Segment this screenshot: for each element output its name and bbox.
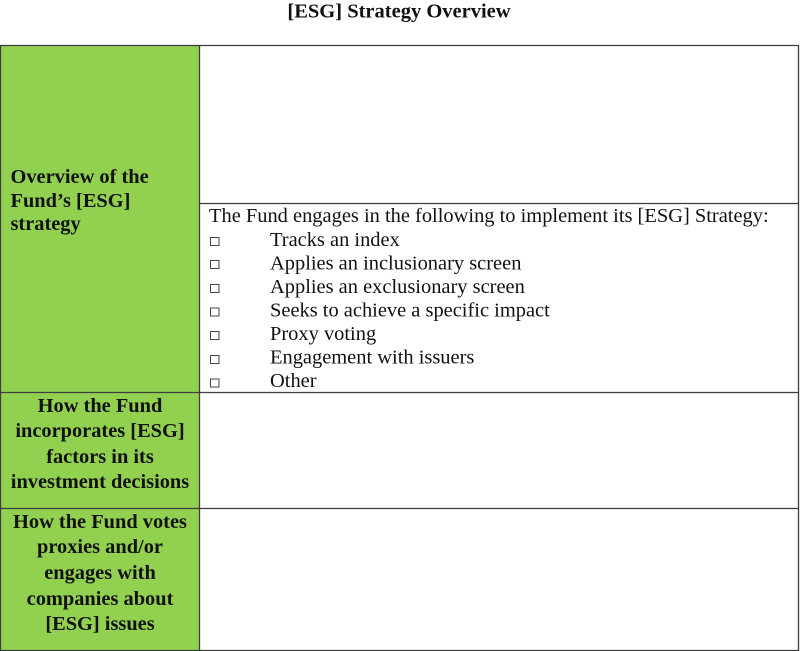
row label: how the fund incorporates factors: investment decisions — [11, 471, 189, 493]
panel: green label column — [0, 46, 200, 650]
row label: overview of strategy: Overview of the — [10, 166, 149, 188]
text: strategy implementation intro: The Fund engages in the following to implement its [ESG] Strategy: — [209, 205, 769, 227]
row label: how the fund votes proxies: companies about — [27, 588, 174, 610]
row label: how the fund votes proxies: How the Fund votes — [13, 511, 187, 533]
row label: overview of strategy: strategy — [10, 213, 81, 235]
checkbox item: proxy voting — [210, 323, 376, 345]
row label: how the fund votes proxies: [ESG] issues — [45, 613, 155, 635]
row label: how the fund incorporates factors: factors in its — [46, 446, 154, 468]
checkbox item: proxy voting: Proxy voting — [270, 323, 376, 345]
checkbox item: other: Other — [270, 370, 317, 392]
checkbox item: tracks an index — [210, 229, 400, 251]
row label: how the fund incorporates factors: How the Fund — [38, 395, 163, 417]
checkbox item: other — [210, 370, 317, 392]
row label: how the fund votes proxies: proxies and/or — [37, 536, 163, 558]
checkbox item: engagement with issuers: Engagement with issuers — [270, 346, 474, 368]
checkbox item: specific impact: Seeks to achieve a specific impact — [270, 300, 550, 322]
row label: how the fund incorporates factors: incorporates [ESG] — [15, 420, 185, 442]
title: [ESG] Strategy Overview — [287, 0, 511, 22]
checkbox item: inclusionary screen: Applies an inclusionary screen — [270, 252, 521, 274]
checkbox item: exclusionary screen: Applies an exclusionary screen — [270, 276, 525, 298]
row label: how the fund votes proxies: engages with — [44, 562, 156, 584]
checkbox item: tracks an index: Tracks an index — [270, 229, 400, 251]
row label: overview of strategy: Fund’s [ESG] — [10, 190, 130, 212]
checklist: implementation options — [210, 229, 550, 392]
